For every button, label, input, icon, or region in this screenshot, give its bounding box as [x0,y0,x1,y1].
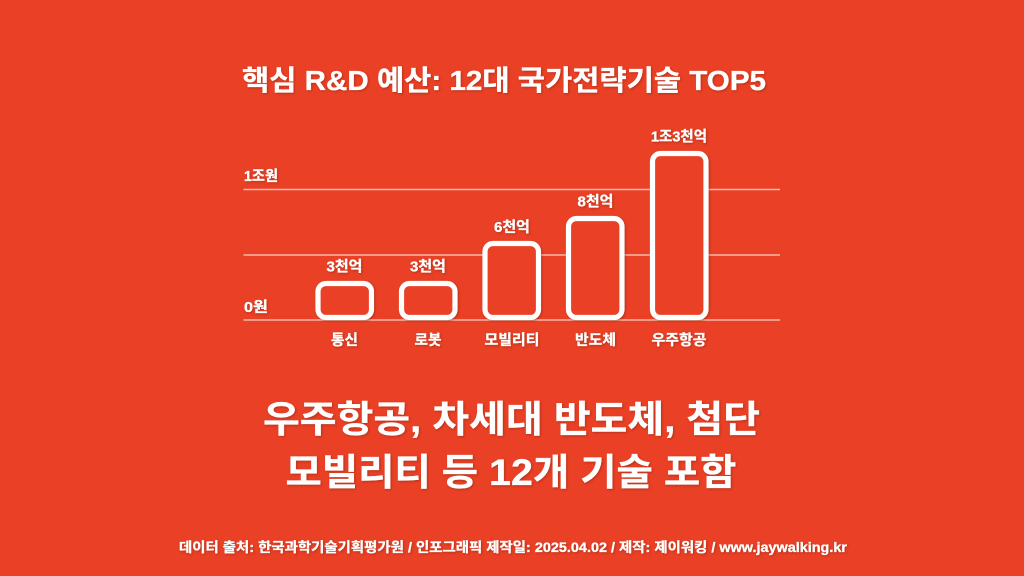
headline line 2: 모빌리티 등 12개 기술 포함 [286,452,736,493]
bar: 통신 [318,284,372,318]
value: 3천억 통신: 3천억 [326,258,362,276]
category: 우주항공: 우주항공 [652,332,706,349]
value: 3천억 로봇: 3천억 [410,258,446,276]
category: 통신: 통신 [331,332,358,349]
category: 로봇: 로봇 [414,332,442,349]
axis label: 0원: 0원 [244,299,268,316]
bar chart [244,128,780,349]
source footer: 데이터 출처: 한국과학기술기획평가원 / 인포그래픽 제작일: 2025.04.02 / 제작: 제이워킹 / www.jaywalking.kr [179,540,848,555]
value: 8천억: 8천억 [578,194,614,210]
title: 핵심 R&D 예산: 12대 국가전략기술 TOP5 [242,65,766,96]
value: 6천억: 6천억 [494,219,530,236]
bar: 반도체 [568,218,622,318]
value: 1조3천억: 1조3천억 [651,128,707,146]
gridlines [244,190,780,320]
headline [263,399,760,493]
category: 반도체: 반도체 [575,332,616,349]
headline line 1: 우주항공, 차세대 반도체, 첨단 [263,399,760,440]
category: 모빌리티: 모빌리티 [484,332,540,349]
bar: 우주항공 [652,154,706,318]
bar: 모빌리티 [485,244,538,318]
bar: 로봇 [402,284,455,318]
axis label: 1조원: 1조원 [244,168,278,185]
